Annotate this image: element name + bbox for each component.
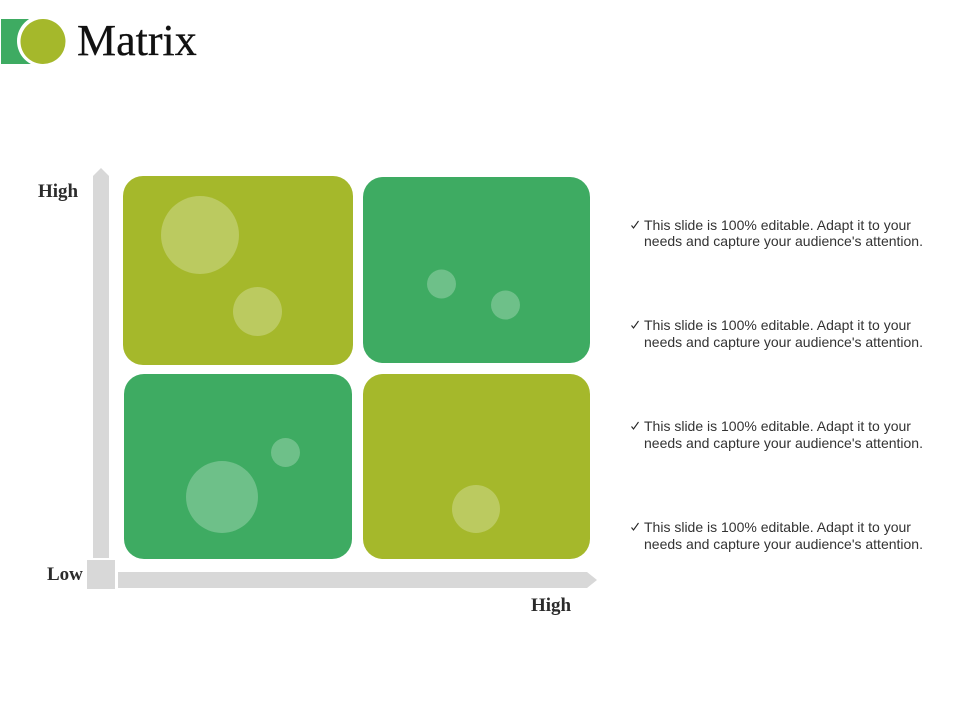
vertical axis arrow (93, 168, 109, 558)
text block 4 (632, 519, 923, 552)
text block 4: This slide is 100% editable. Adapt it to your (644, 519, 911, 535)
panel: bottom-left quadrant (124, 374, 352, 559)
horizontal axis arrow (118, 572, 597, 588)
axis label: high (horizontal): High (531, 595, 572, 616)
text block 2: needs and capture your audience's attention. (644, 334, 923, 350)
bubble: small (271, 438, 300, 467)
axis label: low: Low (47, 564, 83, 585)
title: Matrix (77, 16, 197, 65)
icon: check mark (632, 422, 638, 429)
text block 3: This slide is 100% editable. Adapt it to your (644, 418, 911, 434)
text block 1: needs and capture your audience's attention. (644, 233, 923, 249)
bubble: large (161, 196, 239, 274)
axis origin square (87, 560, 115, 589)
text block 1: This slide is 100% editable. Adapt it to your (644, 217, 911, 233)
icon: check mark (632, 523, 638, 530)
text block 3: needs and capture your audience's attention. (644, 435, 923, 451)
panel: top-right quadrant (363, 177, 590, 363)
bubble: right (491, 290, 520, 320)
axis label: high (vertical): High (38, 181, 79, 202)
text block 1 (632, 217, 923, 249)
icon: check mark (632, 321, 638, 328)
text block 2: This slide is 100% editable. Adapt it to your (644, 317, 911, 333)
bubble (452, 485, 500, 533)
panel: bottom-right quadrant (363, 374, 590, 559)
bubble: small (233, 287, 282, 336)
icon: check mark (632, 221, 638, 228)
text block 4: needs and capture your audience's attention. (644, 536, 923, 552)
bubble: large (186, 461, 258, 533)
text block 2 (632, 317, 923, 350)
header icon: green square and olive circle (1, 15, 69, 67)
panel: top-left quadrant (123, 176, 353, 365)
bubble: left (427, 270, 456, 298)
text block 3 (632, 418, 923, 451)
